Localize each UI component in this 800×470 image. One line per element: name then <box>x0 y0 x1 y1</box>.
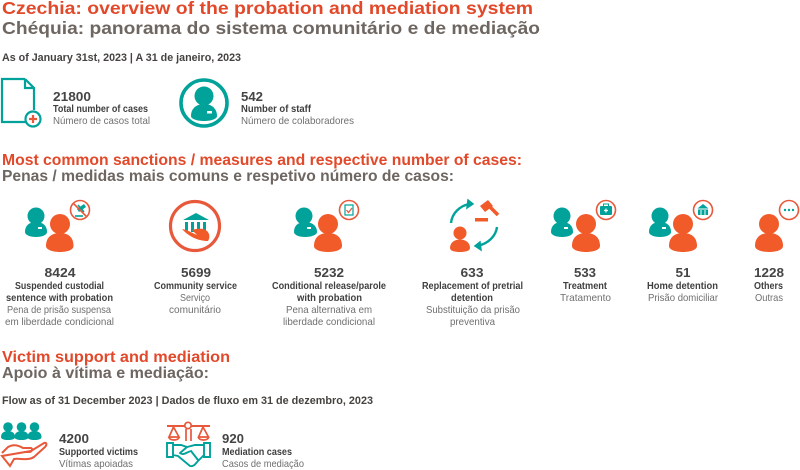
text: community service: Community service <box>154 280 237 292</box>
stat: supported victims <box>1 422 138 470</box>
text: treatment <box>560 265 611 304</box>
text: supported victims <box>59 431 138 470</box>
text: replacement of pretrial detention: detention <box>451 292 493 304</box>
icon: person with dots <box>755 200 798 252</box>
text: others <box>754 265 784 304</box>
panel: replacement of pretrial detention <box>422 200 523 328</box>
text: replacement of pretrial detention <box>422 265 523 328</box>
heading: victim support <box>2 349 230 382</box>
text: supported victims: Vítimas apoiadas <box>59 458 133 470</box>
icon: building on hand in circle <box>170 202 220 250</box>
text: total cases: Número de casos total <box>53 115 150 127</box>
text: total cases: Total number of cases <box>53 103 148 115</box>
icon: people over open hand <box>1 422 46 466</box>
text: supported victims: 4200 <box>59 431 89 446</box>
text: others: Outras <box>755 292 783 304</box>
text: conditional release <box>272 265 386 328</box>
text: community service <box>154 265 237 316</box>
text: suspended sentence: Pena de prisão suspensa <box>7 304 111 316</box>
stat: total cases <box>2 79 150 127</box>
text: replacement of pretrial detention: Replacement of pretrial <box>422 280 523 292</box>
text: others: 1228 <box>754 265 784 280</box>
text: mediation cases: Casos de mediação <box>222 458 304 470</box>
text: home detention: Home detention <box>647 280 718 292</box>
text: suspended sentence: 8424 <box>44 265 76 280</box>
heading: sanctions: Penas / medidas mais comuns e respetivo número de casos: <box>2 168 454 185</box>
text: others: Others <box>754 280 783 292</box>
text: total cases: 21800 <box>53 89 91 104</box>
stat: mediation cases <box>167 422 304 470</box>
text: community service: Serviço <box>180 292 210 304</box>
icon: two people with crossed gavel <box>25 200 90 252</box>
panel: conditional release <box>272 200 386 328</box>
stat: staff <box>181 80 354 127</box>
flow date line: Flow as of 31 December 2023 | Dados de fluxo em 31 de dezembro, 2023 <box>2 395 373 407</box>
text: suspended sentence: em liberdade condicional <box>5 316 114 328</box>
text: treatment: Treatment <box>563 280 607 292</box>
heading: sanctions: Most common sanctions / measures and respective number of cases: <box>2 152 522 169</box>
text: replacement of pretrial detention: 633 <box>460 265 484 280</box>
text: suspended sentence: Suspended custodial <box>15 280 104 292</box>
text: community service: comunitário <box>169 304 221 316</box>
icon: two people with clipboard <box>294 200 358 252</box>
panel: suspended sentence <box>5 200 114 328</box>
icon: two people with house <box>649 200 712 252</box>
panel: others <box>754 200 798 304</box>
title <box>2 0 540 38</box>
text: staff: 542 <box>241 89 263 104</box>
text: staff: Número de colaboradores <box>241 115 354 127</box>
icon: document with plus <box>2 79 40 126</box>
heading: sanctions <box>2 152 522 185</box>
panel: treatment <box>551 200 616 304</box>
panel: community service <box>154 202 237 316</box>
icon: two people with medical bag <box>551 200 616 252</box>
title: Chéquia: panorama do sistema comunitário e de mediação <box>2 18 540 38</box>
text: suspended sentence: sentence with probation <box>6 292 113 304</box>
text: conditional release: Pena alternativa em <box>286 304 372 316</box>
text: community service: 5699 <box>181 265 211 280</box>
text: conditional release: liberdade condicional <box>283 316 375 328</box>
heading: victim support: Apoio à vítima e mediação: <box>2 365 209 382</box>
text: suspended sentence <box>5 265 114 328</box>
text: replacement of pretrial detention: preventiva <box>450 316 495 328</box>
text: home detention: 51 <box>676 265 690 280</box>
icon: scales over handshake <box>167 422 210 466</box>
text: conditional release: Conditional release/parole <box>272 280 386 292</box>
heading: victim support: Victim support and mediation <box>2 349 230 366</box>
text: mediation cases: 920 <box>222 431 244 446</box>
date line: As of January 31st, 2023 | A 31 de janeiro, 2023 <box>2 52 241 64</box>
text: supported victims: Supported victims <box>59 446 138 458</box>
text: home detention <box>647 265 718 304</box>
text: staff: Number of staff <box>241 103 311 115</box>
text: mediation cases <box>222 431 304 470</box>
icon: staff person in circle <box>181 80 227 126</box>
text: staff <box>241 89 354 127</box>
panel: home detention <box>647 200 718 304</box>
text: total cases <box>53 89 150 127</box>
text: treatment: 533 <box>574 265 596 280</box>
icon: gavel, person and cycle arrows <box>450 200 498 252</box>
text: conditional release: 5232 <box>314 265 344 280</box>
text: home detention: Prisão domiciliar <box>648 292 718 304</box>
text: mediation cases: Mediation cases <box>222 446 292 458</box>
text: replacement of pretrial detention: Substituição da prisão <box>426 304 520 316</box>
text: conditional release: with probation <box>296 292 362 304</box>
text: treatment: Tratamento <box>560 292 611 304</box>
